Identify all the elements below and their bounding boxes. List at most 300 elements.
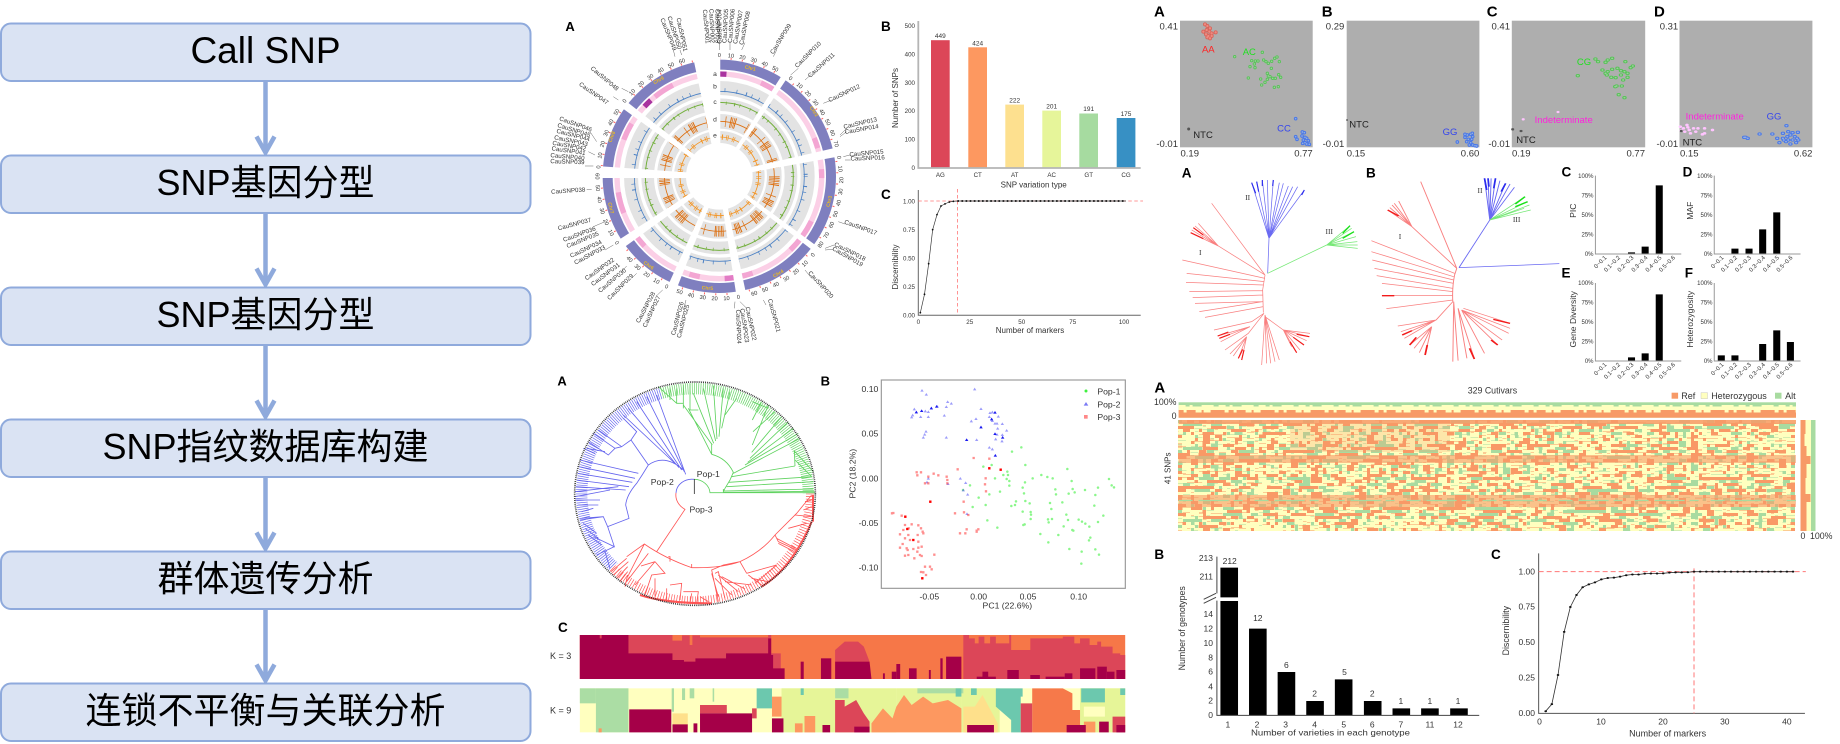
legend: Pop-2 (1097, 399, 1121, 409)
axis labels: 100 (905, 136, 916, 144)
tick numbers: 30 (811, 99, 819, 107)
chart C heading: C (1562, 165, 1572, 180)
SNP marker labels: CauSNP007 (732, 9, 745, 45)
tick numbers: 70 (832, 140, 839, 148)
x tick labels: 0.3~0.4 (1631, 362, 1650, 381)
tick numbers: 0 (596, 165, 602, 169)
tick numbers: 0 (622, 98, 628, 105)
scatter C: -0.01 (1488, 139, 1510, 150)
heatmap y label: 41 SNPs (1164, 453, 1172, 484)
SNP marker labels: CauSNP026 (670, 301, 686, 336)
tick numbers: 10 (801, 260, 810, 269)
reference lines (918, 189, 1143, 315)
x tick labels: 0.4~0.5 (1645, 362, 1664, 381)
value labels: 222 (1009, 98, 1021, 104)
curve (920, 201, 1126, 313)
tick numbers: 30 (838, 188, 845, 195)
SNP marker labels: CauSNP046 (558, 115, 593, 134)
SNP marker labels: CauSNP021 (766, 298, 782, 334)
SNP marker labels: CauSNP029 (606, 272, 636, 302)
top stacked bars (1179, 402, 1796, 418)
tick numbers: 0 (737, 295, 741, 301)
tick numbers: 10 (795, 82, 803, 91)
tick numbers: 20 (711, 296, 718, 302)
SNP marker leader lines (585, 42, 851, 310)
chromosome names: Chr7 (606, 202, 615, 215)
y tick labels: 0% (1704, 359, 1713, 365)
x ticks: 50 (1018, 319, 1026, 326)
x ticks: 0.10 (1070, 592, 1087, 602)
SNP marker labels: CauSNP005 (721, 8, 730, 43)
tick numbers: 0 (613, 240, 620, 246)
tick numbers: 20 (803, 90, 812, 99)
tick numbers: 10 (652, 278, 660, 286)
tick numbers: 30 (633, 263, 641, 272)
heatmap title: 329 Cutivars (1468, 386, 1518, 396)
clade labels: I (1399, 232, 1402, 241)
chromosome names: Chr1 (744, 64, 757, 73)
row label K=3: K = 3 (550, 651, 571, 661)
panel: unrooted tree A (1182, 165, 1358, 365)
track letters a to e: d (713, 116, 717, 123)
stack axis labels: 100% (1154, 397, 1177, 407)
SNP marker labels: CauSNP031 (590, 261, 622, 288)
x tick labels: 0.3~0.4 (1748, 255, 1767, 274)
tree root (693, 479, 696, 494)
clade labels: I (1199, 248, 1202, 257)
y axis titles: PIC (1568, 204, 1578, 218)
x ticks: 11 (1425, 720, 1435, 730)
y axis title: Number of genotypes (1177, 586, 1187, 670)
panel letter A: A (557, 374, 567, 389)
x tick labels: 0.4~0.5 (1645, 255, 1664, 274)
stack axis labels: 0 (1172, 411, 1177, 421)
x ticks: 6 (1370, 720, 1375, 730)
SNP marker labels: CauSNP025 (676, 303, 692, 339)
tick numbers: 10 (628, 88, 637, 97)
axis labels: 0 (912, 165, 916, 172)
clade labels: III (1513, 215, 1521, 224)
y tick labels: 100% (1697, 174, 1713, 180)
y ticks: 0.75 (903, 227, 916, 234)
panel: circos plot (550, 8, 885, 344)
clade labels (1399, 186, 1521, 241)
y tick labels: 75% (1700, 194, 1713, 200)
Pop-3 points (892, 458, 1001, 578)
step labels: Call SNP (190, 30, 341, 71)
tick numbers: 50 (771, 65, 779, 74)
x axis title: PC1 (22.6%) (983, 601, 1032, 611)
axis labels: 500 (905, 23, 916, 30)
scatter B: GG (1443, 127, 1457, 138)
x ticks (1226, 720, 1463, 730)
y axis title: Number of SNPs (891, 68, 900, 128)
y ticks: 10 (1204, 638, 1213, 648)
category labels (936, 172, 1131, 179)
legend: Ref (1681, 391, 1696, 401)
y ticks: 14 (1204, 609, 1213, 619)
panel: PCA scatter (821, 374, 1125, 611)
x tick labels: 0.2~0.3 (1617, 362, 1636, 381)
panel: discernibility curve 2 (1491, 547, 1806, 738)
tick numbers: 40 (657, 67, 665, 75)
x tick labels: 0~0.1 (1593, 362, 1609, 377)
step labels: 连锁不平衡与关联分析 (85, 690, 446, 731)
x tick labels: 0.5~0.6 (1658, 362, 1677, 381)
bars and axes (1595, 176, 1801, 361)
tick numbers: 10 (727, 53, 734, 60)
chart F heading: F (1685, 266, 1693, 281)
tick numbers: 20 (739, 55, 746, 62)
x ticks: 20 (1658, 716, 1668, 726)
tick numbers: 50 (594, 185, 600, 192)
clade labels: II (1478, 186, 1483, 195)
SNP marker labels: CauSNP002 (707, 9, 716, 44)
y ticks: -0.10 (859, 563, 879, 573)
panel letter B: B (821, 374, 830, 389)
SNP marker labels: CauSNP035 (566, 230, 600, 250)
tick numbers: 0 (787, 76, 793, 82)
SNP marker labels: CauSNP044 (556, 128, 591, 144)
tick numbers: 30 (699, 295, 706, 302)
scatter C: 0.19 (1512, 149, 1530, 160)
axis labels: 300 (905, 80, 916, 87)
y ticks: 0.25 (903, 284, 916, 291)
y ticks: 4 (1208, 681, 1213, 691)
green clade (658, 383, 815, 494)
scatter D: GG (1767, 112, 1781, 123)
x ticks: 10 (1596, 716, 1606, 726)
y ticks: 0.00 (861, 473, 879, 483)
chromosome names: Chr2 (808, 105, 819, 118)
panel: genotyping scatter plots (1154, 4, 1812, 160)
tick numbers: 20 (839, 177, 845, 183)
x tick labels: 0~0.1 (1710, 362, 1726, 377)
tick numbers: 60 (751, 290, 758, 298)
y ticks (1518, 566, 1535, 718)
track letters a to e: b (713, 84, 717, 91)
y ticks: 0 (1208, 710, 1213, 720)
chart D heading: D (1683, 165, 1693, 180)
y tick labels: 50% (1700, 320, 1713, 326)
SNP marker labels: CauSNP027 (642, 294, 663, 329)
x tick labels: 0.2~0.3 (1617, 255, 1636, 274)
category labels: GT (1084, 172, 1093, 179)
legend: Alt (1785, 391, 1796, 401)
tick numbers: 40 (595, 196, 602, 203)
SNP marker labels: CauSNP042 (552, 140, 587, 153)
scatter A: 0.41 (1160, 21, 1178, 32)
y tick labels: 0% (1585, 252, 1594, 258)
scatter D: NTC (1683, 137, 1702, 148)
x tick labels: 0~0.1 (1593, 255, 1609, 270)
y ticks: -0.05 (859, 518, 879, 528)
value labels: 1 (1428, 696, 1433, 706)
x ticks: -0.05 (919, 592, 939, 602)
panel letter B: B (1154, 547, 1164, 562)
tick numbers: 40 (687, 292, 695, 300)
tick numbers: 20 (792, 268, 801, 277)
scatter D: 0.62 (1794, 149, 1812, 160)
SNP marker labels: CauSNP023 (738, 308, 750, 343)
branches (1182, 180, 1358, 365)
value labels: 12 (1253, 613, 1263, 623)
tick numbers: 60 (593, 173, 599, 179)
x axis title: Number of markers (1629, 728, 1707, 738)
x tick labels: 0.5~0.6 (1658, 255, 1677, 274)
y ticks: 213 (1199, 553, 1213, 563)
y tick labels: 50% (1581, 320, 1594, 326)
SNP marker labels: CauSNP004 (716, 9, 723, 44)
y ticks (1199, 553, 1213, 720)
bars (931, 40, 1135, 168)
panel letter: B (1366, 165, 1376, 180)
scatter D: -0.01 (1657, 139, 1678, 150)
track letters a to e: a (713, 71, 717, 78)
circos rings (601, 58, 837, 294)
x ticks: 30 (1720, 716, 1730, 726)
scatter B (1322, 4, 1479, 160)
tick numbers (593, 53, 845, 302)
sector gaps (596, 54, 841, 298)
step labels: 群体遗传分析 (157, 558, 374, 599)
y ticks: 2 (1208, 696, 1213, 706)
tip dots (575, 382, 815, 605)
y axis titles: Gene Diversity (1568, 290, 1578, 347)
value labels: 2 (1312, 689, 1317, 699)
blue clade (575, 388, 694, 570)
y tick labels: 100% (1578, 174, 1594, 180)
y ticks: 0.10 (861, 384, 879, 394)
y ticks: 211 (1199, 571, 1213, 581)
step labels: SNP基因分型 (156, 294, 375, 335)
Pop-2 points (910, 388, 1008, 515)
SNP marker labels: CauSNP018 (833, 241, 867, 263)
chromosome names: Chr9 (652, 75, 665, 86)
panel letter A: A (565, 19, 575, 34)
tick numbers: 50 (832, 210, 840, 218)
track letters a to e: e (713, 133, 717, 140)
SNP marker labels: CauSNP010 (794, 40, 823, 70)
step boxes (1, 24, 530, 741)
x tick labels: 0.4~0.5 (1762, 255, 1781, 274)
tick numbers: 20 (600, 141, 607, 148)
tick numbers: 30 (647, 73, 655, 82)
y ticks: 6 (1208, 667, 1213, 677)
category labels: AT (1011, 172, 1019, 179)
SNP marker labels: CauSNP033 (573, 244, 607, 266)
category labels: CG (1121, 172, 1131, 179)
x ticks: 7 (1399, 720, 1404, 730)
value labels: 1 (1399, 696, 1404, 706)
x tick labels: 0.1~0.2 (1603, 362, 1622, 381)
y tick labels: 25% (1700, 232, 1713, 238)
x tick labels: 0.5~0.6 (1776, 362, 1795, 381)
value labels: 424 (972, 40, 984, 48)
row label K=9: K = 9 (550, 706, 571, 716)
y tick labels: 100% (1697, 281, 1713, 287)
tick numbers: 30 (782, 275, 791, 283)
scatter C: CG (1577, 57, 1591, 68)
tick numbers: 40 (607, 119, 616, 127)
tick numbers: 40 (817, 108, 826, 117)
tick numbers: 10 (597, 152, 604, 159)
clade labels (1199, 193, 1334, 257)
y axis title: Discernibility (891, 245, 900, 289)
x tick labels: 0~0.1 (1710, 255, 1726, 270)
SNP marker labels: CauSNP014 (844, 123, 880, 136)
SNP marker labels: CauSNP011 (807, 51, 837, 79)
y tick labels: 0% (1704, 252, 1713, 258)
SNP marker labels: CauSNP048 (589, 65, 620, 93)
tick numbers: 0 (718, 53, 721, 59)
y ticks: 1.00 (1518, 566, 1535, 576)
chromosome names: Chr6 (642, 260, 655, 272)
x ticks: 0 (1537, 716, 1542, 726)
tick numbers: 60 (828, 221, 836, 229)
scatter D: D (1654, 4, 1665, 21)
tick numbers: 40 (836, 199, 843, 207)
scatter C: Indeterminate (1535, 115, 1593, 126)
x ticks: 4 (1312, 720, 1317, 730)
x ticks: 0.05 (1020, 592, 1037, 602)
SNP marker labels: CauSNP009 (769, 22, 793, 56)
right axis labels: 0 (1800, 531, 1806, 541)
tick numbers: 0 (835, 155, 841, 160)
plot frame (881, 380, 1125, 588)
scatter C (1487, 4, 1645, 160)
x ticks: 100 (1119, 319, 1130, 326)
SNP marker labels: CauSNP024 (734, 309, 742, 344)
y ticks: 0.00 (1518, 708, 1535, 718)
category labels: CT (974, 172, 982, 179)
SNP marker labels: CauSNP017 (843, 219, 878, 237)
tick numbers: 40 (625, 255, 633, 264)
value labels: 201 (1046, 104, 1058, 110)
SNP marker labels: CauSNP001 (701, 9, 711, 44)
chromosome names: Chr3 (825, 195, 834, 208)
Pop-3 dense points (905, 468, 1001, 578)
legend: Pop-1 (1097, 386, 1121, 396)
scatter A: 0.77 (1294, 149, 1313, 160)
value labels: 5 (1342, 667, 1347, 677)
x tick labels: 0.2~0.3 (1734, 362, 1753, 381)
SNP marker labels: CauSNP015 (849, 148, 884, 158)
scatter B: -0.01 (1323, 139, 1344, 150)
y ticks: 8 (1208, 652, 1213, 662)
SNP marker labels: CauSNP020 (806, 270, 835, 300)
legend (1672, 391, 1796, 401)
tick numbers: 30 (603, 129, 611, 137)
value labels: 191 (1083, 106, 1095, 113)
panel: workflow flowchart (1, 24, 530, 741)
legend: Heterozygous (1711, 391, 1767, 401)
SNP marker labels: CauSNP041 (551, 145, 587, 157)
SNP marker labels: CauSNP003 (714, 9, 721, 44)
x ticks: 0.00 (970, 592, 987, 602)
tick numbers: 30 (598, 207, 605, 215)
tick numbers: 40 (760, 61, 768, 69)
track letters a to e: c (713, 99, 717, 106)
x ticks (1537, 716, 1792, 726)
clade labels: Pop-1 (697, 469, 720, 479)
panel: unrooted tree B (1366, 165, 1559, 362)
SNP marker labels: CauSNP036 (562, 225, 597, 244)
x ticks: 25 (966, 319, 974, 326)
scatter C: 0.41 (1492, 21, 1510, 32)
right stacked bars (1800, 420, 1816, 531)
y tick labels: 50% (1581, 213, 1594, 219)
scatter B: 0.15 (1347, 149, 1365, 160)
axis labels (905, 23, 916, 172)
tick numbers: 10 (723, 296, 730, 302)
tick numbers: 80 (817, 241, 826, 249)
tick numbers: 60 (678, 58, 686, 66)
SNP marker labels: CauSNP039 (550, 158, 585, 166)
x axis title: SNP variation type (1001, 180, 1067, 190)
tick numbers: 40 (772, 281, 780, 289)
x tick labels: 0.2~0.3 (1734, 255, 1753, 274)
y tick labels: 100% (1578, 281, 1594, 287)
tick numbers: 10 (606, 229, 614, 237)
right axis labels: 100% (1810, 531, 1833, 541)
x axis title: Number of markers (996, 326, 1064, 335)
tick numbers: 50 (613, 108, 621, 117)
y axis title: PC2 (18.2%) (848, 449, 858, 498)
y ticks (859, 384, 879, 573)
panel letter C: C (1491, 547, 1501, 562)
value labels (1223, 556, 1461, 706)
tick numbers: 60 (828, 129, 836, 137)
panel: circular population tree (557, 374, 815, 605)
scatter A: AC (1243, 47, 1256, 58)
chart E heading: E (1562, 266, 1571, 281)
SNP marker labels: CauSNP037 (557, 217, 593, 232)
tick numbers: 20 (642, 271, 650, 279)
stack axis labels (1154, 397, 1177, 421)
scatter A: AA (1202, 44, 1215, 56)
panel: diversity bar charts (1562, 165, 1801, 381)
y tick labels (1578, 174, 1713, 365)
axes (918, 190, 1141, 315)
y tick labels: 75% (1700, 300, 1713, 306)
tick numbers: 20 (601, 218, 609, 226)
step labels: SNP基因分型 (156, 162, 375, 203)
clade labels (651, 469, 720, 514)
x ticks: 5 (1341, 720, 1346, 730)
panel: genotype count bar chart (1154, 547, 1479, 738)
value labels: 449 (935, 33, 946, 40)
panel letter C: C (881, 187, 891, 202)
legend: Pop-3 (1097, 412, 1121, 422)
y ticks: 0.25 (1518, 673, 1535, 683)
scatter B: 0.29 (1326, 21, 1344, 32)
panel letter A: A (1154, 380, 1165, 397)
scatter D: 0.15 (1680, 149, 1698, 160)
SNP marker labels: CauSNP032 (584, 256, 616, 282)
tick numbers: 30 (750, 57, 757, 65)
x axis title: Number of varieties in each genotype (1251, 728, 1410, 738)
x ticks: 0 (917, 319, 921, 326)
x ticks: 1 (1226, 720, 1231, 730)
panel: SNP variation bar chart (881, 19, 1141, 190)
SNP marker labels: CauSNP034 (569, 239, 604, 260)
tick numbers: 10 (836, 165, 843, 172)
clade labels: II (1245, 193, 1251, 202)
panel: structure plots (550, 620, 1125, 732)
y ticks: 0.00 (903, 312, 916, 319)
y tick labels: 75% (1581, 194, 1594, 200)
